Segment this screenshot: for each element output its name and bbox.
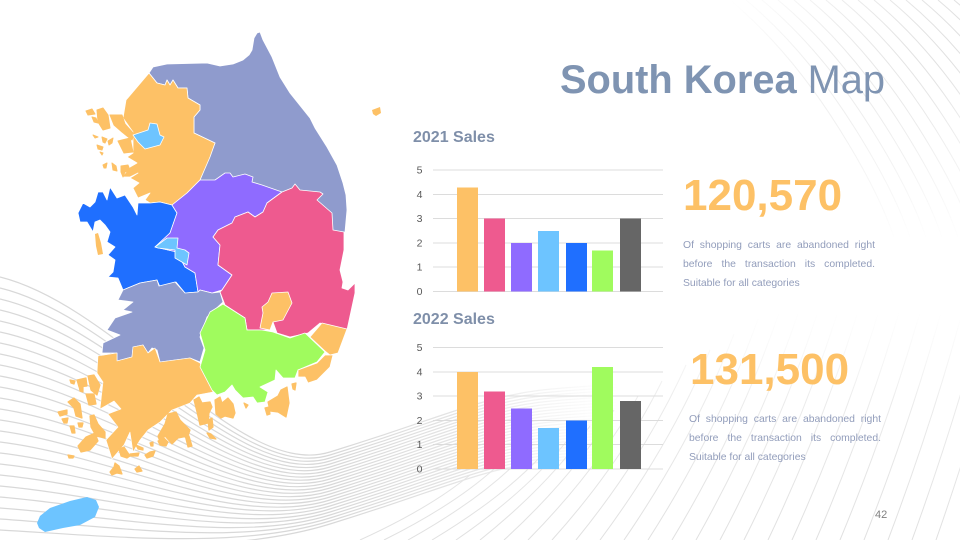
region: Chungbuk (purple) — [155, 173, 282, 293]
region: Jeonnam (orange) — [58, 345, 296, 475]
region: Jeonbuk (periwinkle) — [102, 280, 223, 362]
region: Gyeongbuk (pink) — [213, 184, 355, 337]
region: Gangwon (periwinkle) — [149, 32, 347, 240]
description 1: before the transaction its completed. — [683, 259, 875, 270]
y-axis labels — [417, 164, 423, 298]
y-axis labels: 5 — [417, 164, 423, 176]
y-axis labels: 2 — [417, 415, 423, 427]
region: Busan and Ulsan (orange) — [298, 323, 347, 383]
page number: 42 — [875, 509, 887, 521]
heading: 2021 Sales: 2021 Sales — [413, 129, 495, 146]
description 1: Of shopping carts are abandoned right — [683, 240, 875, 251]
y-axis labels: 1 — [417, 439, 423, 451]
y-axis labels: 4 — [417, 366, 423, 378]
island: orange islet off Chungnam — [95, 233, 103, 255]
bars — [457, 367, 641, 469]
region: Daegu (orange) — [260, 292, 292, 330]
y-axis labels: 3 — [417, 390, 423, 402]
y-axis labels: 0 — [417, 286, 423, 298]
island: Ulleungdo — [372, 107, 381, 116]
y-axis labels: 5 — [417, 342, 423, 354]
region: Chungnam (blue) — [78, 187, 198, 293]
stat: 131,500: 131,500 — [690, 345, 849, 394]
heading: 2022 Sales: 2022 Sales — [413, 311, 495, 328]
description 2: before the transaction its completed. — [689, 433, 881, 444]
y-axis labels: 4 — [417, 189, 423, 201]
island: Jeju (light blue) — [37, 497, 99, 532]
region: Gyeongnam (green) — [200, 304, 325, 403]
region: Sejong and Daejeon (light blue) — [155, 238, 189, 265]
y-axis labels: 3 — [417, 213, 423, 225]
region: Seoul (light blue) — [133, 123, 164, 149]
description 1: Suitable for all categories — [683, 278, 800, 289]
description 2 — [689, 414, 881, 463]
y-axis labels: 2 — [417, 238, 423, 250]
description 1 — [683, 240, 875, 289]
region: Gyeonggi (orange) — [86, 73, 215, 205]
y-axis labels — [417, 342, 423, 476]
title: South Korea Map — [560, 58, 885, 102]
bars — [457, 188, 641, 292]
y-axis labels: 1 — [417, 262, 423, 274]
y-axis labels: 0 — [417, 464, 423, 476]
description 2: Suitable for all categories — [689, 452, 806, 463]
stat: 120,570: 120,570 — [683, 171, 842, 220]
description 2: Of shopping carts are abandoned right — [689, 414, 881, 425]
